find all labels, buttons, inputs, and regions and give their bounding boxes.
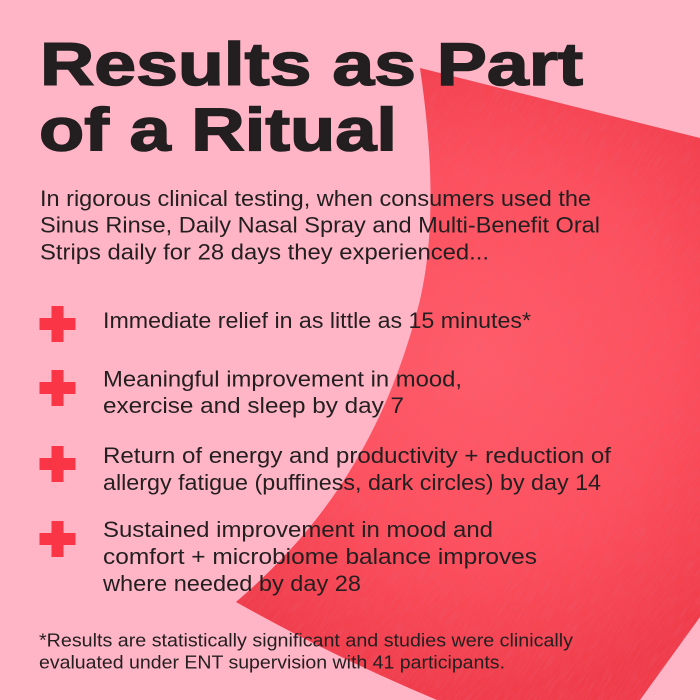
item: day 7: Meaningful improvement in mood,: [103, 366, 462, 392]
item: day 7: [40, 366, 462, 418]
intro text: Sinus Rinse, Daily Nasal Spray and Multi-Benefit Oral: [40, 213, 600, 238]
item: day 28: [40, 517, 537, 596]
intro text: [40, 186, 600, 264]
title: of a Ritual: [39, 96, 397, 164]
footnote: [39, 630, 573, 672]
item: day 28: comfort + microbiome balance improves: [103, 544, 537, 569]
title: [39, 31, 583, 164]
item: day 7: exercise and sleep by day 7: [103, 393, 404, 418]
item: day 28: where needed by day 28: [102, 571, 361, 596]
item: day 14: allergy fatigue (puffiness, dark circles) by day 14: [103, 470, 601, 495]
intro text: In rigorous clinical testing, when consumers used the: [40, 186, 591, 211]
item: immediate relief: [40, 306, 531, 342]
footnote: evaluated under ENT supervision with 41 participants.: [39, 652, 505, 672]
item: day 28: Sustained improvement in mood and: [103, 517, 493, 542]
title: Results as Part: [40, 31, 583, 98]
intro text: Strips daily for 28 days they experienced...: [40, 239, 489, 264]
benefits list: [40, 306, 612, 596]
red paper shape: [230, 60, 700, 700]
item: day 14: [40, 443, 612, 495]
footnote: *Results are statistically significant and studies were clinically: [39, 630, 573, 650]
item: day 14: Return of energy and productivity + reduction of: [103, 443, 612, 468]
item: immediate relief: Immediate relief in as little as 15 minutes*: [103, 308, 531, 333]
